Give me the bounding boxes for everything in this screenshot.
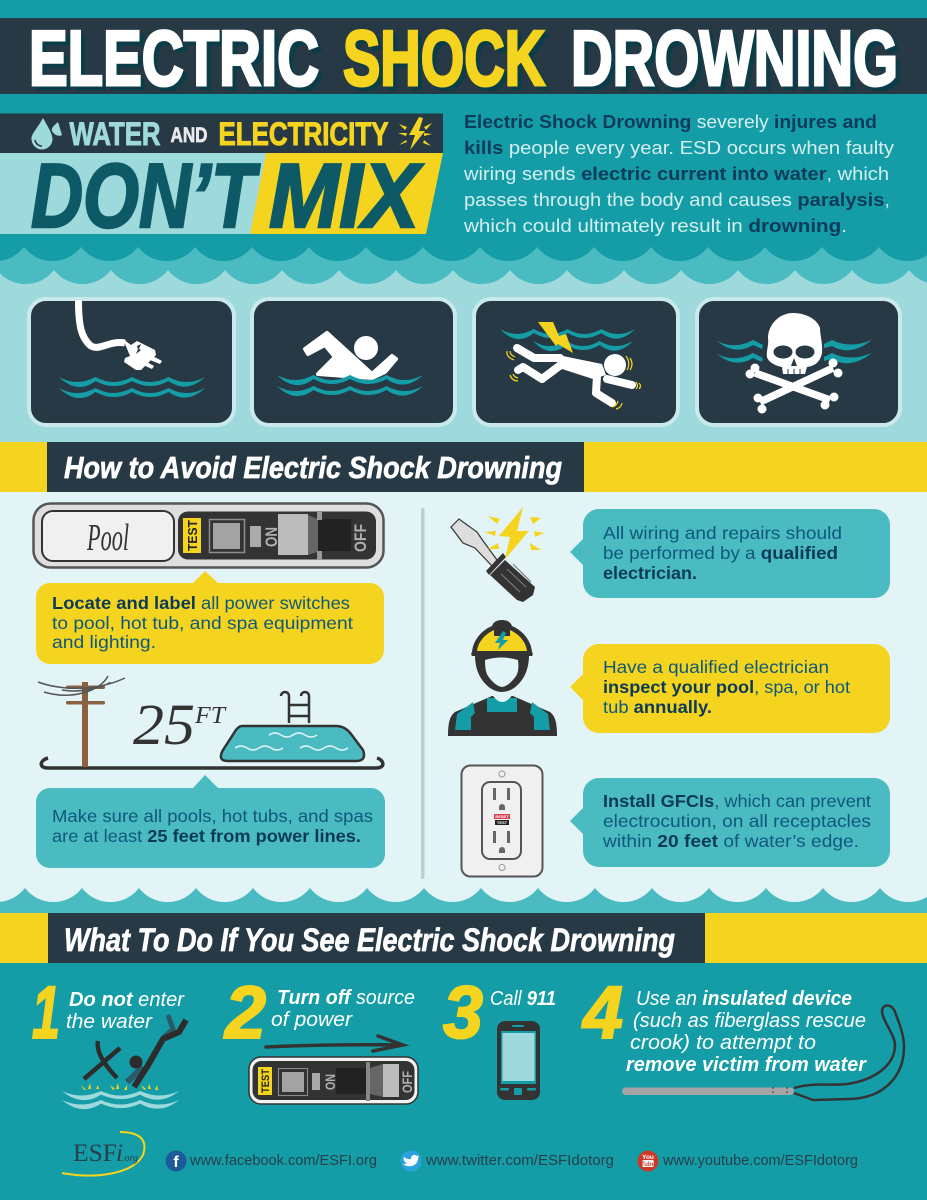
callout: locate and label: to pool, hot tub, and spa equipment	[52, 613, 353, 633]
callout: 25 feet from power lines: are at least 25 feet from power lines.	[52, 826, 361, 846]
callout: locate and label: Locate and label all power switches	[52, 593, 350, 613]
intro paragraph	[463, 111, 895, 236]
facebook link: f	[173, 1154, 179, 1171]
icon: GFCI outlet	[462, 766, 542, 876]
intro paragraph: passes through the body and causes paralysis ,	[464, 189, 890, 210]
panel: swimmer in water	[252, 299, 455, 425]
callout: install GFCIs	[570, 778, 890, 867]
youtube link: You	[642, 1154, 654, 1161]
callout: 25 feet from power lines: Make sure all pools, hot tubs, and spas	[52, 806, 373, 826]
logo: ESFI.org: i	[116, 1140, 123, 1167]
breaker switch off: TEST	[260, 1069, 272, 1093]
intro paragraph: kills people every year. ESD occurs when faulty	[464, 137, 895, 158]
breaker switch off: ON	[322, 1074, 338, 1090]
callout: qualified electrician: All wiring and repairs should	[603, 523, 842, 543]
heading: what to do	[0, 913, 927, 963]
subtitle block: water and electricity don't mix: WATER	[70, 116, 160, 152]
arrow: switch direction	[266, 1036, 403, 1051]
logo: ESFI.org: ESF	[73, 1140, 117, 1167]
icon: smartphone	[497, 1021, 540, 1100]
callout: qualified electrician: electrician.	[603, 563, 697, 583]
callout: qualified electrician	[570, 509, 890, 598]
step 3: call 911: Call 911	[490, 988, 556, 1010]
step 2: turn off source of power	[223, 971, 418, 1104]
heading: how to avoid	[0, 442, 927, 492]
icon: person diving with legs	[62, 1015, 186, 1109]
subtitle block: water and electricity don't mix: DON’T	[31, 146, 260, 247]
step 4: use insulated device: (such as fiberglass rescue	[633, 1010, 866, 1032]
breaker switch labelled pool: TEST	[185, 520, 200, 551]
title banner: ELECTRIC	[33, 18, 323, 106]
callout: inspect annually	[570, 644, 890, 733]
step 3: call 911: 3	[443, 971, 483, 1054]
callout: inspect annually: inspect your pool , spa, or hot	[603, 677, 850, 697]
facebook link: www.facebook.com/ESFI.org	[189, 1153, 377, 1169]
icon: GFCI outlet: RESET	[495, 814, 509, 819]
youtube link: Tube	[641, 1162, 656, 1168]
icon: fiberglass rescue crook	[622, 1006, 904, 1100]
step 1: do not enter the water	[32, 971, 186, 1109]
step 2: turn off source of power: Turn off source	[277, 987, 415, 1009]
subtitle block: water and electricity don't mix: MIX	[269, 146, 424, 247]
logo: ESFI.org: .org	[122, 1152, 138, 1164]
breaker switch off: OFF	[399, 1071, 415, 1093]
title banner	[0, 14, 927, 106]
intro paragraph: Electric Shock Drowning severely injures and	[464, 111, 877, 132]
step 4: use insulated device: Use an insulated device	[636, 988, 852, 1010]
step 2: turn off source of power: of power	[271, 1009, 353, 1031]
intro paragraph: which could ultimately result in drowning .	[463, 215, 847, 236]
icon: lightning bolt with sparks	[398, 117, 432, 150]
youtube link	[638, 1150, 858, 1172]
panel: person shocked in water	[474, 299, 678, 425]
callout: locate and label: and lighting.	[52, 632, 156, 652]
callout: inspect annually: tub annually.	[603, 697, 712, 717]
icon: GFCI outlet: TEST	[497, 820, 508, 825]
panel: skull and crossbones	[697, 299, 900, 425]
illustration: power pole to pool distance: FT	[194, 703, 227, 729]
breaker switch labelled pool: OFF	[351, 524, 370, 552]
icon: electrician with hard hat	[448, 620, 557, 736]
twitter link	[400, 1150, 614, 1172]
step 4: use insulated device: 4	[581, 971, 623, 1054]
callout: 25 feet from power lines	[36, 775, 385, 868]
breaker switch labelled pool: Pool	[86, 517, 129, 559]
panel: plug above water	[29, 299, 234, 425]
icon: screwdriver with spark	[451, 507, 544, 602]
facebook link	[166, 1150, 377, 1172]
breaker switch labelled pool	[34, 504, 384, 568]
heading: how to avoid: How to Avoid Electric Shock Drowning	[64, 450, 562, 485]
callout: install GFCIs: Install GFCIs, which can prevent	[603, 791, 871, 811]
illustration: power pole to pool distance	[38, 676, 383, 768]
icon: water drops	[31, 118, 62, 150]
step 2: turn off source of power: 2	[223, 971, 266, 1054]
step 1: do not enter the water: Do not enter	[69, 989, 185, 1011]
breaker switch labelled pool: ON	[262, 527, 281, 547]
title banner: SHOCK	[343, 14, 545, 102]
subtitle block: water and electricity don't mix: ELECTRICITY	[218, 116, 389, 152]
subtitle block: water and electricity don't mix	[0, 114, 443, 247]
step 4: use insulated device	[581, 971, 904, 1100]
callout: qualified electrician: be performed by a qualified	[603, 543, 838, 563]
callout: install GFCIs: within 20 feet of water’s edge.	[602, 831, 859, 851]
logo: ESFI.org	[62, 1132, 144, 1176]
subtitle block: water and electricity don't mix: AND	[170, 123, 208, 147]
heading: what to do: What To Do If You See Electric Shock Drowning	[64, 922, 675, 958]
title banner: SHOCK	[347, 18, 549, 106]
twitter link: www.twitter.com/ESFIdotorg	[425, 1153, 614, 1169]
step 4: use insulated device: crook) to attempt to	[630, 1032, 816, 1054]
step 1: do not enter the water: the water	[66, 1011, 153, 1033]
step 1: do not enter the water: 1	[32, 971, 60, 1054]
step 3: call 911	[443, 971, 556, 1100]
youtube link: www.youtube.com/ESFIdotorg	[662, 1153, 858, 1169]
illustration: power pole to pool distance: 25	[133, 692, 195, 757]
step 4: use insulated device: remove victim from water	[626, 1054, 867, 1076]
callout: install GFCIs: electrocution, on all receptacles	[603, 811, 871, 831]
callout: inspect annually: Have a qualified electrician	[603, 657, 829, 677]
title banner: ELECTRIC	[29, 14, 319, 102]
breaker switch off	[249, 1057, 418, 1104]
intro paragraph: wiring sends electric current into water , which	[463, 163, 889, 184]
callout: locate and label	[36, 571, 384, 664]
